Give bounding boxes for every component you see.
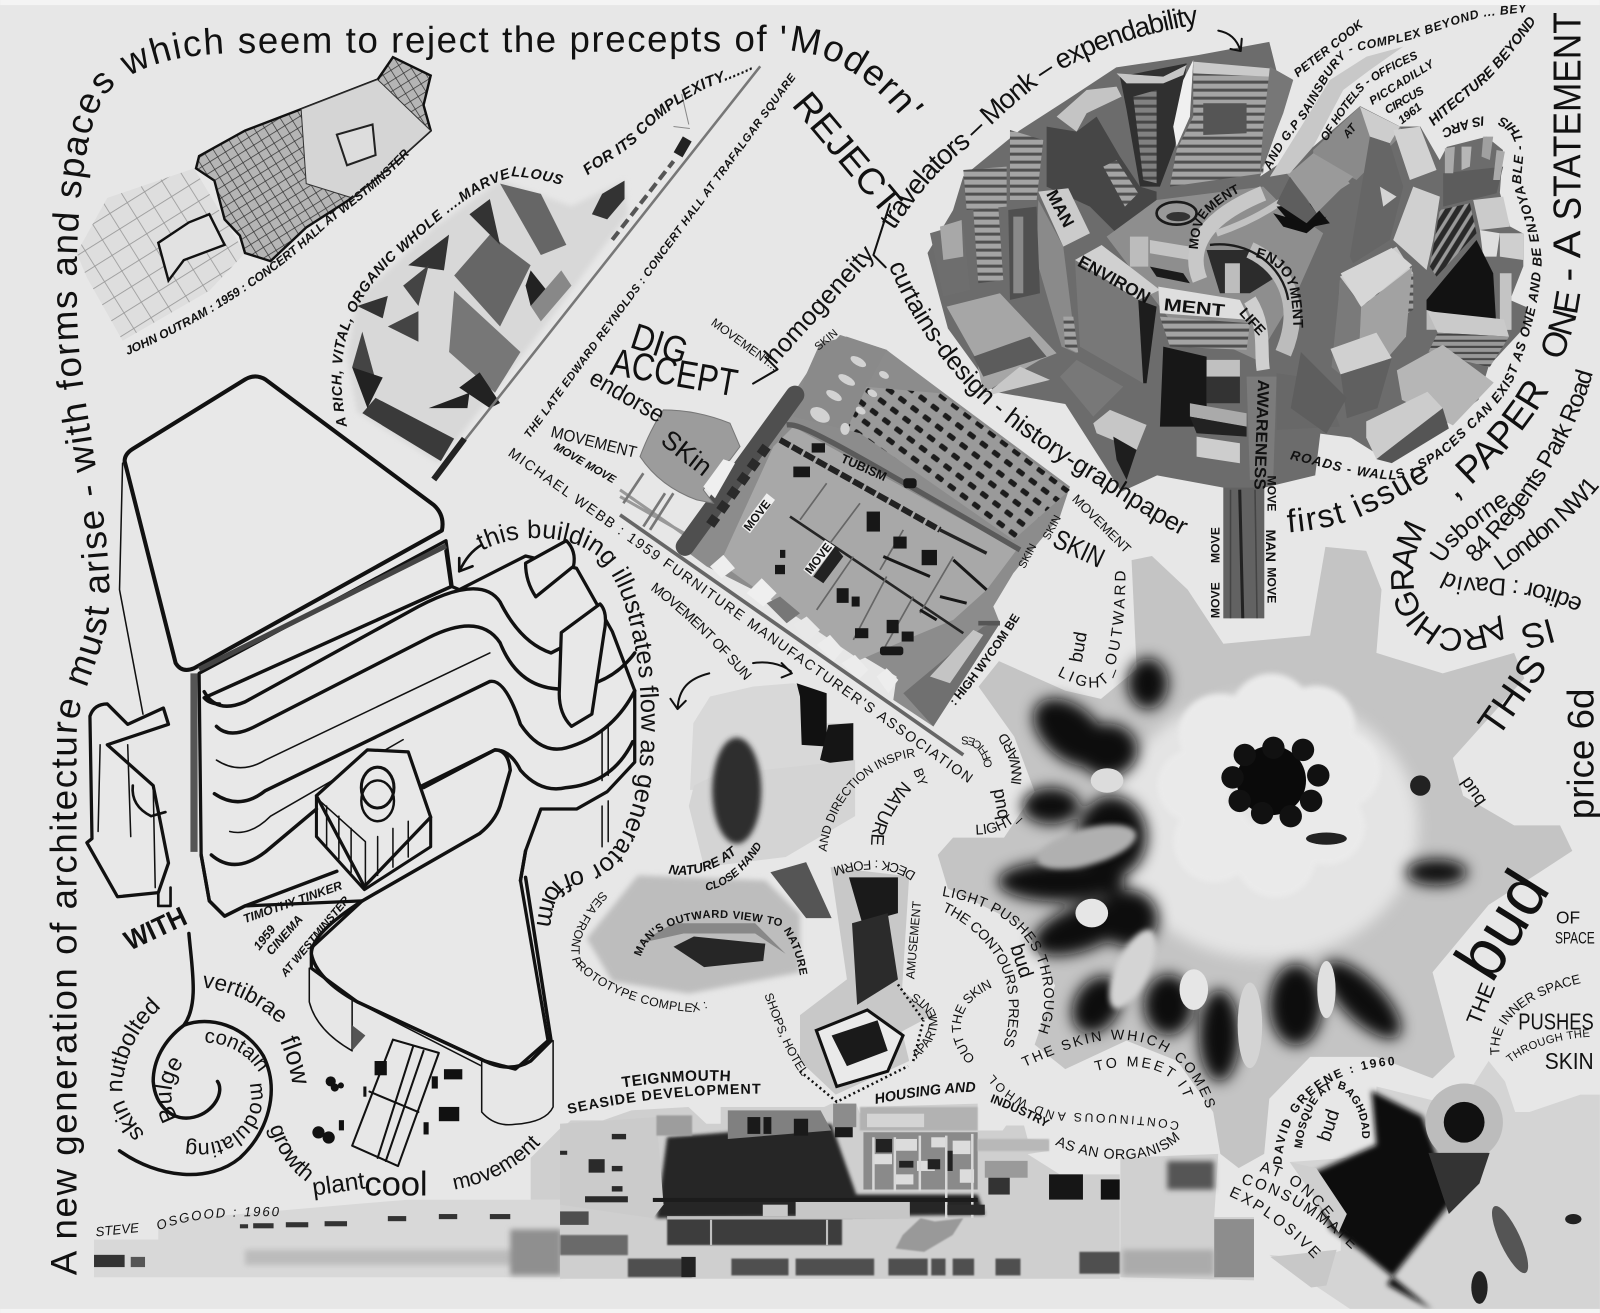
caption: nature at close hand: CLOSE HAND [704,840,765,894]
spiral words: plant [310,1167,367,1202]
caption: roads walls spaces: ROADS - WALLS - SPACES CAN EXIST AS ONE AND BE ENJOYABLE - THIS [1290,118,1542,480]
text: the skin which comes: CONTINUOUS AND WHOLE [0,0,1180,1133]
words: this is: IS [1517,611,1559,656]
heading: Archigram paper one a statement: , PAPER [1454,381,1549,502]
editor and address: 84 Regents Park Road [1466,369,1593,561]
city ribbon labels: ENJOYMENT [1256,248,1304,328]
Skin chair shape [640,410,740,503]
text: move man around road stem: MOVE [1264,475,1278,511]
text: move man around road stem: MOVE [1264,567,1278,603]
caption: deck form and direction: BY [910,766,931,788]
caption: deck form and direction: AND DIRECTION INSPIRED [0,0,916,852]
words: dig accept endorse: DIG [626,315,693,372]
caption: David Greene: DAVID GREENE : 1960 [1273,1056,1394,1164]
caption: Timothy Tinker: TIMOTHY TINKER [243,882,342,922]
text: skin and movement near building: SKIN [1016,542,1039,571]
spiral words: cool [364,1166,428,1204]
text: skin and movement near building: MOVEMENT... [708,316,781,374]
words: dig accept endorse: ACCEPT [608,341,741,405]
caption: Teignmouth: SEASIDE DEVELOPMENT [566,1082,761,1118]
words: at once consummate explosive: EXPLOSIVE [1230,1186,1321,1258]
the bud of space: OF [1556,907,1580,927]
caption: sea front prototype: SEA FRONT PROTOTYPE COMPLEX : [568,889,709,1015]
text: movement labels on chair: SKin [656,424,718,482]
sun tower photo [587,683,933,1102]
arrow to city model [1218,31,1242,51]
words: at once consummate explosive: AT ONCE [1259,1162,1334,1218]
words: bud by right arm: bud [1455,773,1490,811]
text: skin and movement near building: SKIN [1048,523,1110,574]
entrance stairs [352,1040,439,1166]
caption: Timothy Tinker: AT WESTMINSTER [282,896,346,978]
city right blocks [1270,47,1523,330]
caption: Teignmouth: TEIGNMOUTH [621,1068,731,1091]
caption: amusement apartments shops hotel: AMUSEMENT [903,900,924,980]
text: skin and movement near building: SKIN [1041,513,1064,542]
spiral words: Bulge [155,1058,182,1124]
caption: David Greene: MOSQUE AT BAGHDAD [1294,1080,1370,1148]
the bud of space [1441,857,1595,1028]
spiral words: skin nutbolted [110,996,160,1140]
caption: Timothy Tinker: CINEMA [263,912,306,958]
entry post [158,888,171,906]
lower slab lip [204,551,451,704]
caption: Edward Reynolds: THE LATE EDWARD REYNOLDS : CONCERT HALL AT TRAFALGAR SQUARE [524,72,796,438]
spiral words [110,976,540,1204]
city ribbon labels: MOVEMENT [1188,184,1238,249]
caption: Timothy Tinker: 1959 [251,922,279,953]
sun arrows [670,662,792,709]
the inner space pushes through the skin: SKIN [1545,1048,1594,1074]
caption: movement of sun: MOVEMENT OF SUN [648,580,754,684]
spiral words: modulating [186,1084,263,1158]
the bud of space: bud [1441,857,1564,992]
triangle pattern pencil drawing [347,66,760,479]
text: move man around road stem: MOVE [1208,527,1222,563]
isometric building line drawing [87,376,635,1166]
spiral words: growth [266,1126,312,1182]
caption: Peter Cook: 1961 [1396,101,1424,127]
caption: amusement apartments shops hotel [765,901,938,1076]
text: the skin which comes [876,1030,1215,1160]
city ribbon labels: MAN [1042,186,1079,231]
caption: man's outward view: MAN'S OUTWARD VIEW TO NATURE [632,909,809,977]
building labels [741,452,889,577]
heading: Archigram paper one a statement: - A [1546,230,1589,282]
dark shadows [998,658,1467,1081]
text: the skin which comes: INDUSTRY [989,1092,1052,1130]
words: curtains design history graphpaper: curtains-design - history-graphpaper [890,262,1188,534]
text: light outward inward: bud [986,787,1012,821]
word: WITH: WITH [119,901,191,956]
caption: John Outram: JOHN OUTRAM : 1959 : CONCERT HALL AT WESTMINSTER [126,149,410,354]
slash marks [753,204,890,384]
caption: Steve Osgood [95,1206,279,1239]
heading: Archigram paper one a statement: ARCHIGRAM [1391,520,1504,651]
main pad [362,750,510,901]
text: this building illustrates flow: this building illustrates flow as generator of form [476,520,659,926]
words: dig accept endorse [585,315,741,429]
text: skin and movement near building [708,316,1134,574]
text: light outward inward: INWARD [995,730,1025,786]
caption: Teignmouth [568,1070,761,1114]
caption: Peter Cook: CIRCUS [1383,84,1426,117]
text: light outward inward: LIGHT_ [975,807,1024,839]
heading: Archigram paper one a statement: ONE [1542,290,1580,356]
the inner space pushes through the skin [1490,974,1594,1074]
text: light pushes through: bud [1005,941,1037,981]
editor and address [1430,369,1600,610]
text: skin and movement near building: MOVEMENT [1069,491,1134,556]
building labels: MOVE [741,497,773,534]
caption: amusement apartments shops hotel: APARTMENTS [909,990,941,1061]
spiral words: contain [205,1032,266,1072]
caption: nature at close hand [668,842,760,890]
top slab [125,376,443,670]
caption: Peter Cook: PETER COOK [1291,17,1367,80]
text: the skin which comes: THE SKIN WHICH COMES [1020,1028,1218,1110]
spiral words: vertibrae [204,976,285,1022]
caption: deck form and direction: NATURE [867,778,915,846]
main title perimeter text: A new generation of architecture must arise - with forms and spaces which seem to reject the precepts of 'Modern' [50,24,924,1276]
the inner space pushes through the skin: THE INNER SPACE [1490,974,1581,1056]
words: travelators monk expendability: travelators – Monk – expendability [880,8,1196,228]
caption: Steve Osgood: OSGOOD : 1960 [154,1204,280,1233]
caption: roads walls spaces: IS ARC [1442,116,1484,138]
roof knobs [526,541,574,597]
caption: Peter Cook: OF HOTELS - OFFICES [1322,52,1418,140]
city ribbon labels [1042,184,1304,490]
text: the skin which comes: AS AN ORGANISM [1053,1129,1183,1163]
words: dig accept endorse: endorse [585,364,669,429]
tier lines [204,589,587,706]
big bud star photo [938,547,1572,1168]
text: move man around road stem: MAN [1262,529,1278,562]
text: light outward inward: bud [1065,630,1091,664]
caption: Timothy Tinker [243,882,346,978]
caption: David Greene: bud [1313,1107,1344,1144]
small bud photo [1269,1061,1600,1313]
Outram concert hall plan [77,57,431,341]
word: REJECT: REJECT [785,84,910,222]
city ribbon labels: ENVIRON [1075,251,1154,307]
caption: Michael Webb: MICHAEL WEBB : 1959 FURNITURE MANUFACTURER'S ASSOCIATION [505,445,975,787]
text: move man around road stem [1208,475,1278,618]
caption: rich vital organic whole: A RICH, VITAL, ORGANIC WHOLE ....MARVELLOUS [332,166,564,427]
spiral words: flow [280,1036,307,1083]
words: at once consummate explosive: CONSUMMATE [1242,1174,1355,1249]
caption: Peter Cook: PICCADILLY [1367,57,1437,108]
caption: Peter Cook: AND G.P SAINSBURY - COMPLEX BEYOND ... BEY [1265,5,1526,170]
caption: amusement apartments shops hotel: SHOPS, HOTEL [761,991,811,1078]
arrow to building [459,545,482,571]
word: homogeneity: homogeneity [763,246,874,364]
central flower [1157,673,1380,898]
caption: roads walls spaces: HITECTURE BEYOND [1428,17,1534,126]
Webb furniture manufacturers building photo [620,335,1070,755]
text: movement labels on chair [549,423,718,486]
caption: deck form and direction: DECK : FORM [832,857,918,883]
right vertical bars [602,726,608,847]
left tower [87,704,168,897]
caption: Peter Cook: AT [1340,121,1360,141]
building labels: MOVE [802,540,835,577]
heading: Archigram paper one a statement [1391,12,1589,651]
caption: nature at close hand: NATURE AT [668,843,740,878]
spiral line [120,933,271,1175]
text: movement labels on chair: MOVE MOVE [552,441,618,486]
text: light outward inward: LIGHT_OUTWARD [1055,570,1129,692]
text: the skin which comes: TO MEET IT [1093,1054,1195,1100]
caption: deck form and direction [818,748,931,880]
text: movement labels on chair: MOVEMENT [549,423,639,462]
city ribbon labels: AWARENESS [1250,379,1272,490]
text: light pushes through: OUT THE SKIN [949,976,994,1066]
building labels: TUBISM [839,452,889,484]
city lower right blocks [1223,248,1509,618]
text: light outward inward [951,571,1126,835]
caption: rich vital organic whole [332,67,752,427]
caption: Steve Osgood: STEVE [95,1220,140,1239]
words: first issue: first issue [1286,467,1428,532]
text: light outward inward: OFFICES [961,733,995,768]
text: the skin which comes: HOUSING AND [873,1080,976,1108]
bottom seaside development photo [94,1104,1254,1280]
city ribbon labels: MENT [1163,294,1226,321]
the inner space pushes through the skin: THROUGH THE [1506,1029,1590,1062]
city megastructure model photo [928,42,1526,618]
base wall [201,855,337,916]
text: light pushes through: THE CONTOURS PRESS [940,900,1021,1049]
words: this is: THIS [1470,647,1556,744]
city ribbon labels: LIFE [1236,305,1268,339]
city left and centre blocks [930,60,1350,480]
spiral words: movement [453,1136,540,1190]
caption: rich vital organic whole: FOR ITS COMPLEXITY....... [583,67,752,176]
trees [312,1061,462,1144]
the bud of space: THE [1462,980,1500,1028]
text: move man around road stem: MOVE [1208,582,1222,618]
text: skin and movement near building: SKIN [813,327,840,353]
text: light pushes through: LIGHT PUSHES THROUGH [941,884,1056,1036]
editor and address: editor : David Usborne [1430,495,1581,610]
small cube building [316,750,431,887]
text: light outward inward: : HIGH WYCOM BE [947,611,1023,708]
gallery band [199,541,635,1069]
